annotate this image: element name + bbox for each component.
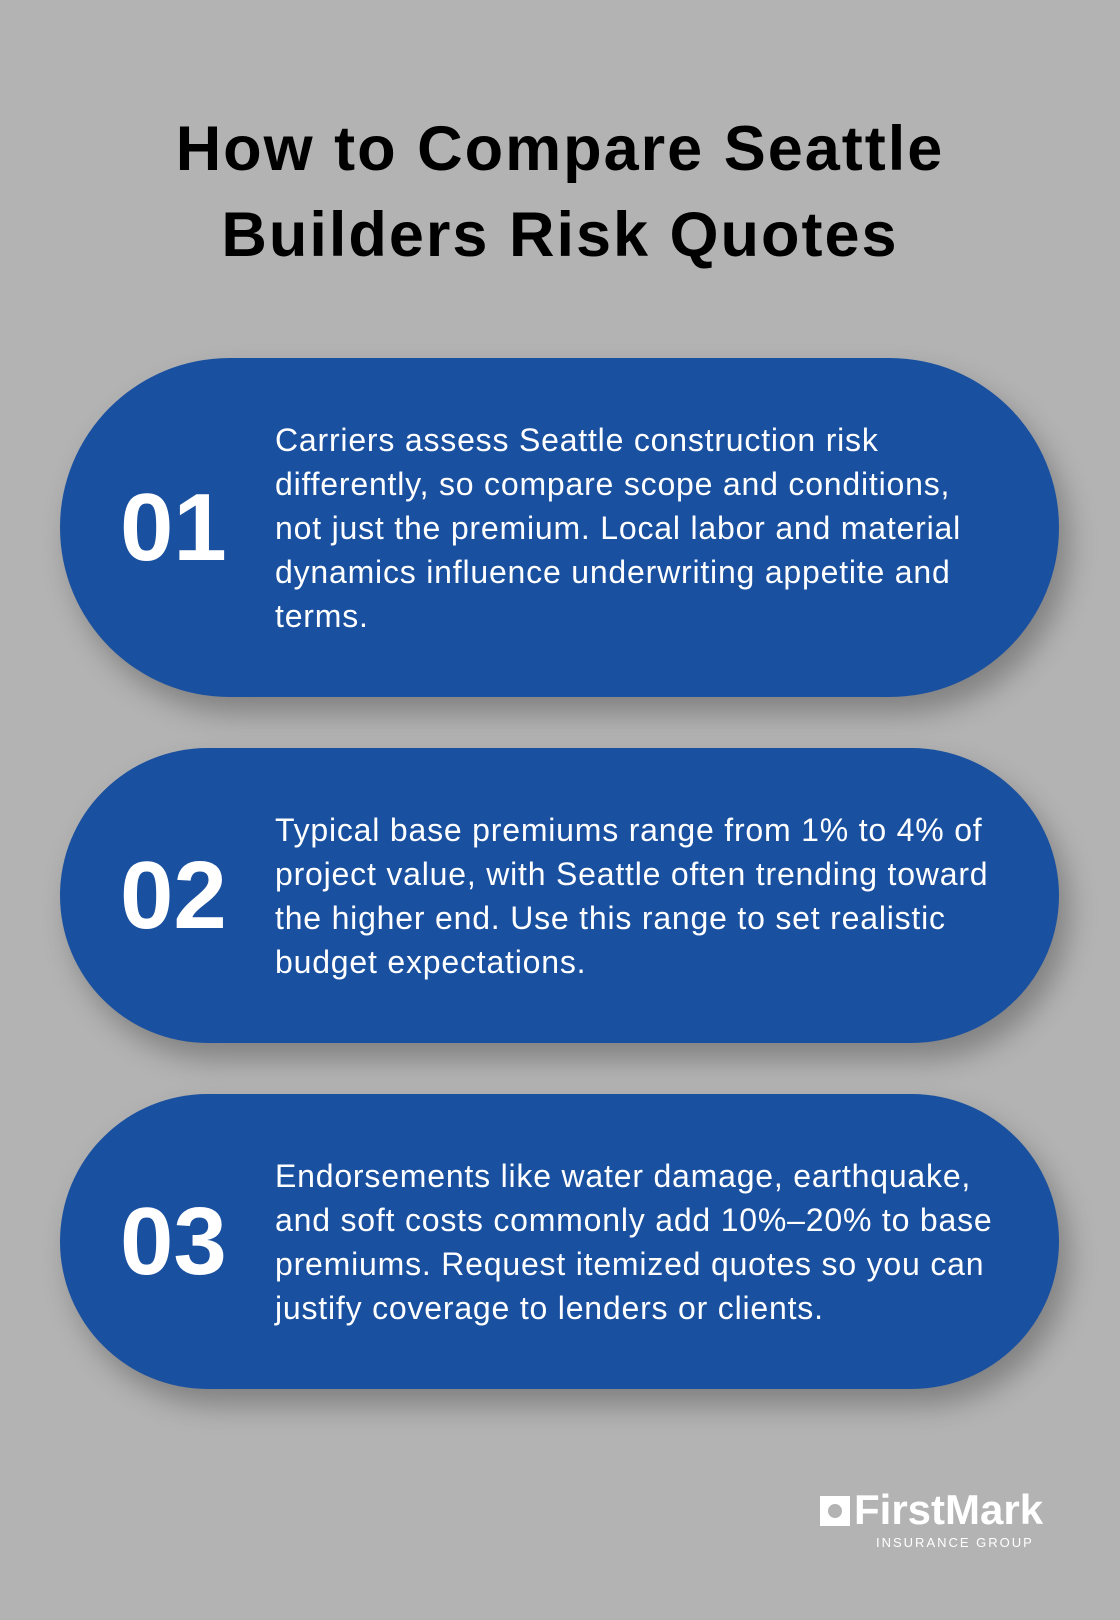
text block 03: justify coverage to lenders or clients. — [275, 1290, 824, 1326]
icon: logo square — [820, 1496, 850, 1526]
number 01: 01 — [120, 474, 227, 580]
text block 03: and soft costs commonly add 10%–20% to base — [275, 1202, 992, 1238]
number 03: 03 — [120, 1188, 227, 1294]
text block 03 — [274, 1158, 992, 1326]
logo wordmark: FirstMark — [854, 1486, 1043, 1533]
text block 01: not just the premium. Local labor and material — [275, 510, 961, 546]
text block 02: budget expectations. — [275, 944, 586, 980]
text block 03: Endorsements like water damage, earthquake, — [275, 1158, 971, 1194]
text block 01: Carriers assess Seattle construction risk — [275, 422, 879, 458]
number 02: 02 — [120, 842, 227, 948]
text block 02: the higher end. Use this range to set realistic — [275, 900, 946, 936]
text block 01: differently, so compare scope and conditions, — [275, 466, 950, 502]
title: How to Compare Seattle — [176, 114, 944, 184]
text block 03: premiums. Request itemized quotes so you can — [275, 1246, 984, 1282]
text block 02: project value, with Seattle often trending toward — [275, 856, 988, 892]
panel: 02 — [60, 748, 1059, 1043]
text block 02 — [275, 812, 988, 980]
text block 01: dynamics influence underwriting appetite and — [275, 554, 951, 590]
text block 01: terms. — [275, 598, 369, 634]
panel: 03 — [60, 1094, 1059, 1389]
title: Builders Risk Quotes — [221, 200, 899, 270]
title — [176, 114, 944, 270]
text block 02: Typical base premiums range from 1% to 4% of — [275, 812, 982, 848]
panel: 01 — [60, 358, 1059, 697]
logo subtitle: INSURANCE GROUP — [876, 1535, 1034, 1550]
text block 01 — [275, 422, 961, 634]
logo — [820, 1486, 1043, 1550]
